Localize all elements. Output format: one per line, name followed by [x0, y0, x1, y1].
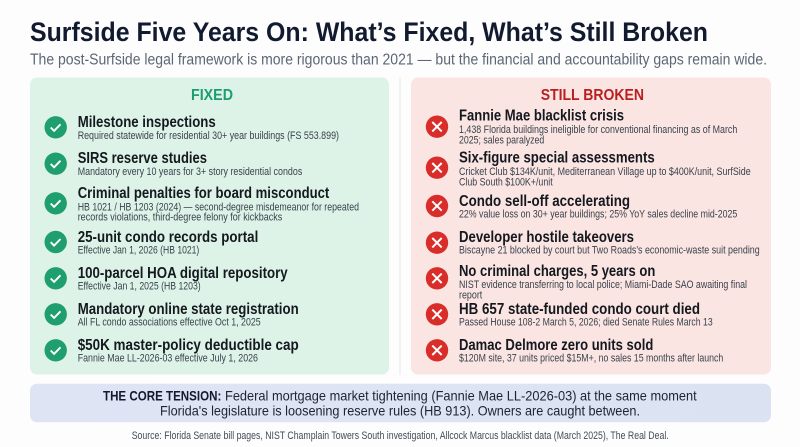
callout: core tension: [30, 384, 771, 422]
item: HB 657: HB 657 state-funded condo court died: [459, 301, 700, 318]
item: deductible cap: [44, 337, 299, 365]
item: online state registration: All FL condo associations effective Oct 1, 2025: [78, 317, 261, 329]
item: blacklist crisis: 2025; sales paralyzed: [459, 134, 544, 146]
item: online state registration: Mandatory online state registration: [78, 301, 299, 318]
item: Damac Delmore: [426, 337, 723, 365]
item: special assessments: [426, 150, 751, 188]
item: no criminal charges: No criminal charges, 5 years on: [459, 263, 655, 280]
item: condo sell-off: Condo sell-off accelerating: [459, 193, 630, 210]
callout: core tension: Federal mortgage market tightening (Fannie Mae LL-2026-03) at the same moment: [225, 387, 697, 403]
item: blacklist crisis: [426, 108, 737, 146]
item: condo records portal: [44, 229, 258, 257]
item: criminal penalties: [44, 185, 359, 223]
item: online state registration: [44, 301, 299, 329]
item: condo sell-off: 22% value loss on 30+ year buildings; 25% YoY sales decline mid-2025: [459, 209, 737, 221]
item: milestone inspections: Required statewide for residential 30+ year buildings (FS 553.899): [78, 130, 339, 142]
item: condo sell-off: [426, 193, 737, 221]
panel: still broken: [411, 78, 771, 374]
item: HOA digital repository: 100-parcel HOA digital repository: [78, 265, 288, 282]
item: criminal penalties: Criminal penalties for board misconduct: [78, 185, 330, 202]
callout: core tension: THE CORE TENSION:: [103, 387, 221, 403]
heading: fixed: FIXED: [191, 87, 233, 104]
item: criminal penalties: records violations, third-degree felony for kickbacks: [78, 211, 283, 223]
item: SIRS reserve studies: SIRS reserve studies: [78, 150, 207, 167]
panel: fixed: [30, 78, 389, 374]
item: SIRS reserve studies: [44, 150, 303, 178]
source note: Source: Florida Senate bill pages, NIST Champlain Towers South investigation, Allcock Marcus blacklist data (March 2025), The Real Deal.: [132, 430, 669, 442]
item: HOA digital repository: [44, 265, 288, 293]
heading: still broken: STILL BROKEN: [541, 87, 644, 104]
item: deductible cap: Fannie Mae LL-2026-03 effective July 1, 2026: [78, 353, 258, 365]
item: milestone inspections: Milestone inspections: [78, 114, 216, 131]
item: HB 657: Passed House 108-2 March 5, 2026; died Senate Rules March 13: [459, 317, 713, 329]
item: hostile takeovers: Developer hostile takeovers: [459, 229, 634, 246]
item: deductible cap: $50K master-policy deductible cap: [78, 337, 299, 354]
item: criminal penalties: HB 1021 / HB 1203 (2024) — second-degree misdemeanor for repeated: [78, 201, 359, 213]
item: no criminal charges: [426, 263, 747, 301]
item: HOA digital repository: Effective Jan 1, 2025 (HB 1203): [78, 281, 201, 293]
item: special assessments: Club South $100K+/unit: [459, 176, 553, 188]
item: condo records portal: Effective Jan 1, 2026 (HB 1021): [78, 245, 199, 257]
item: blacklist crisis: 1,438 Florida buildings ineligible for conventional financing as of March: [459, 124, 737, 136]
item: hostile takeovers: [426, 229, 760, 257]
item: HB 657: [426, 301, 713, 329]
item: blacklist crisis: Fannie Mae blacklist crisis: [459, 108, 624, 125]
item: Damac Delmore: Damac Delmore zero units sold: [459, 337, 653, 354]
title: Surfside Five Years On: What’s Fixed, What’s Still Broken: [30, 17, 708, 47]
item: no criminal charges: report: [459, 289, 482, 301]
item: condo records portal: 25-unit condo records portal: [78, 229, 258, 246]
item: special assessments: Six-figure special assessments: [459, 150, 655, 167]
item: Damac Delmore: $120M site, 37 units priced $15M+, no sales 15 months after launch: [459, 353, 723, 365]
callout: core tension: Florida's legislature is loosening reserve rules (HB 913). Owners are caught between.: [160, 403, 640, 419]
item: milestone inspections: [44, 114, 339, 142]
item: SIRS reserve studies: Mandatory every 10 years for 3+ story residential condos: [78, 166, 303, 178]
